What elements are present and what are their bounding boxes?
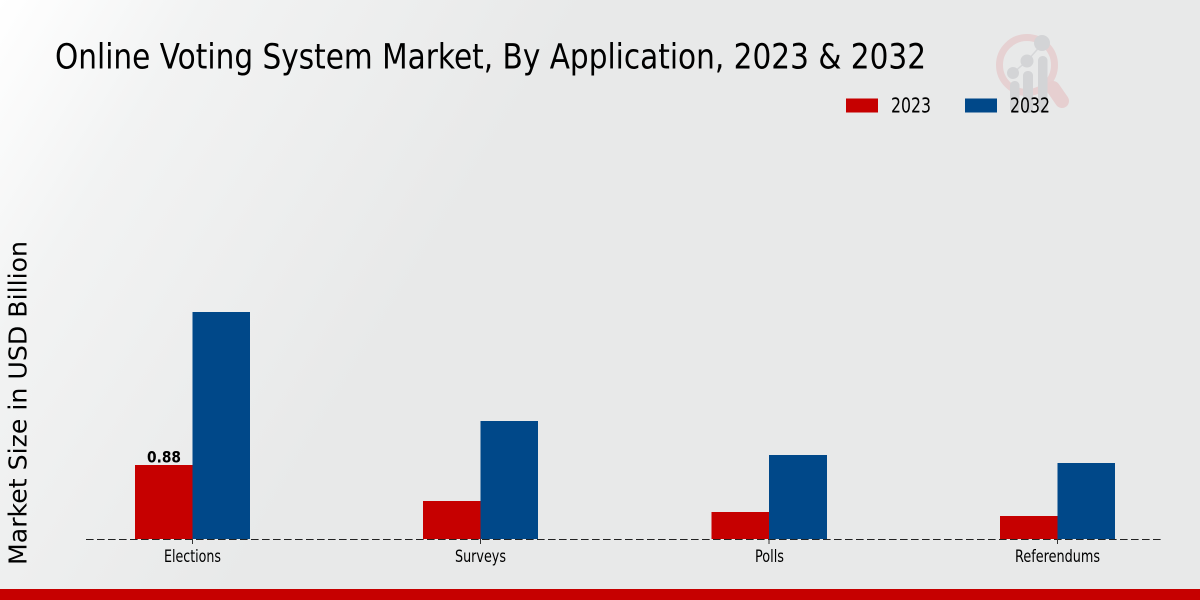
bar chart xyxy=(86,312,1164,566)
footer bar xyxy=(0,589,1200,600)
x axis labels: Referendums xyxy=(1015,547,1100,566)
group: Polls xyxy=(712,455,827,539)
icon: watermark logo xyxy=(1000,35,1062,113)
title: Online Voting System Market, By Application, 2023 & 2032 xyxy=(55,38,926,78)
x axis labels: Polls xyxy=(755,547,784,566)
y axis label: Market Size in USD Billion xyxy=(4,241,32,565)
legend: 2023 xyxy=(846,94,931,118)
legend: 2023: 2023 xyxy=(891,94,931,118)
value label: 0.88 xyxy=(147,448,181,466)
group: Surveys xyxy=(423,421,538,539)
legend: 2032 xyxy=(965,94,1050,118)
legend: 2032: 2032 xyxy=(1010,94,1050,118)
x axis labels xyxy=(164,547,1100,566)
group: Elections xyxy=(135,312,250,539)
x axis xyxy=(86,539,1164,544)
legend xyxy=(846,94,1050,118)
x axis labels: Surveys xyxy=(455,547,506,566)
x axis labels: Elections xyxy=(164,547,221,566)
group: Referendums xyxy=(1000,463,1115,539)
